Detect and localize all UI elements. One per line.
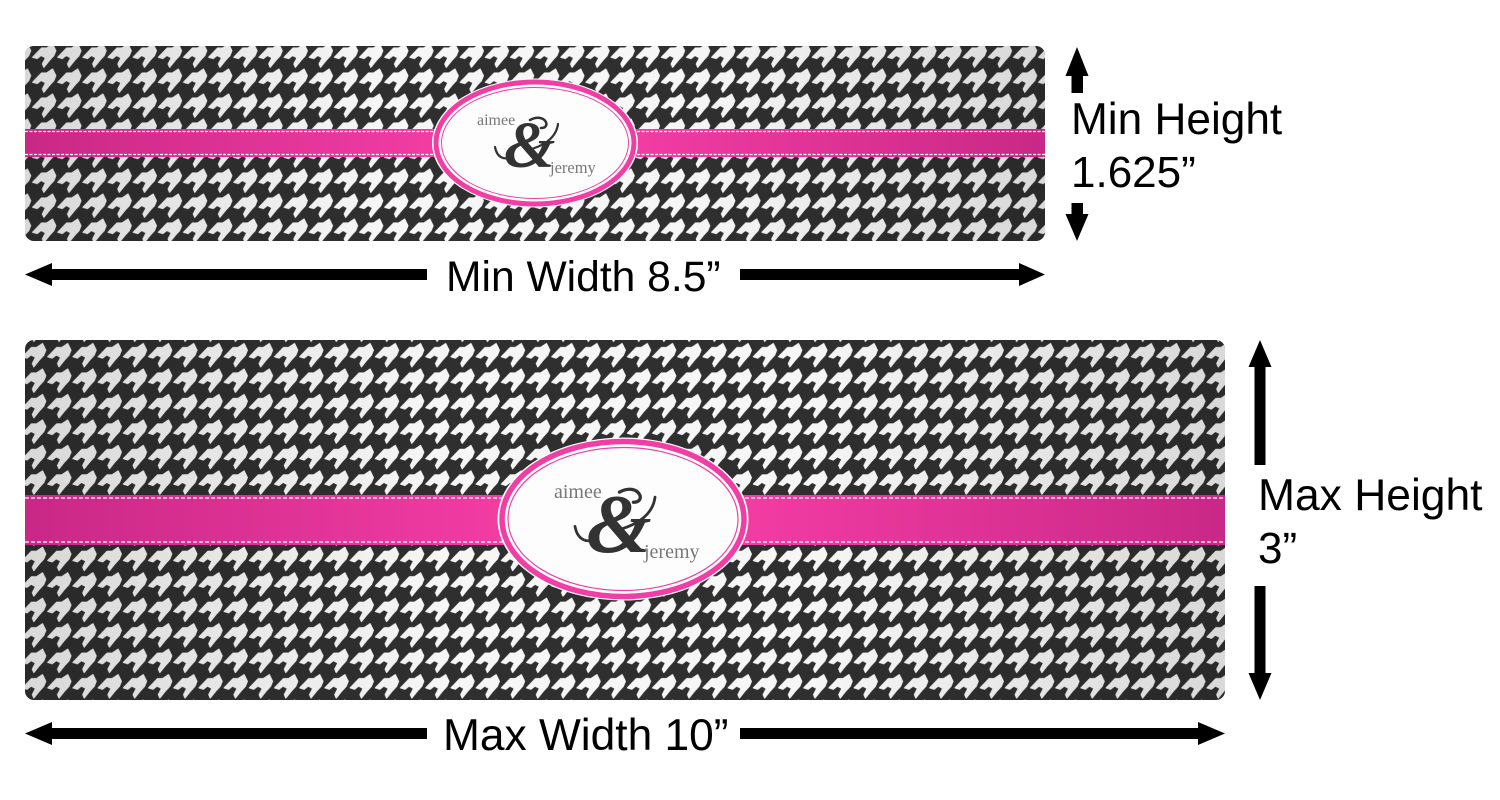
arrow: min width left: [25, 263, 427, 286]
label: min height: Min Height: [1071, 95, 1282, 144]
label: max width: Max Width 10”: [443, 711, 729, 760]
arrow: min height up: [1066, 47, 1088, 93]
arrow: min width right: [740, 263, 1045, 286]
arrow: max height down: [1248, 586, 1272, 700]
panel: minimum size houndstooth label: [25, 46, 1045, 241]
arrow: max width right: [740, 722, 1225, 745]
label: max height value: 3”: [1258, 524, 1297, 573]
oval monogram badge: min panel: [432, 78, 638, 208]
label: max height: Max Height: [1258, 471, 1483, 520]
label: min width: Min Width 8.5”: [446, 253, 721, 301]
arrow: max width left: [25, 722, 427, 745]
arrow: max height up: [1248, 340, 1272, 465]
label: min height value: 1.625”: [1071, 148, 1196, 197]
name: jeremy: jeremy: [643, 541, 700, 563]
name: aimee: aimee: [477, 112, 515, 129]
arrow: min height down: [1066, 203, 1088, 241]
houndstooth pattern: max panel: [25, 340, 1225, 700]
name: jeremy: jeremy: [549, 158, 597, 177]
monogram ampersand with flourishes: &: [504, 109, 555, 182]
panel: maximum size houndstooth label: [25, 340, 1225, 700]
pink ribbon: max panel: [25, 495, 1225, 545]
monogram ampersand with flourishes: &: [586, 478, 652, 571]
oval monogram badge: max panel: [498, 438, 748, 600]
name: aimee: aimee: [554, 481, 602, 503]
houndstooth pattern: min panel: [25, 46, 1045, 241]
pink ribbon: min panel: [25, 129, 1045, 157]
